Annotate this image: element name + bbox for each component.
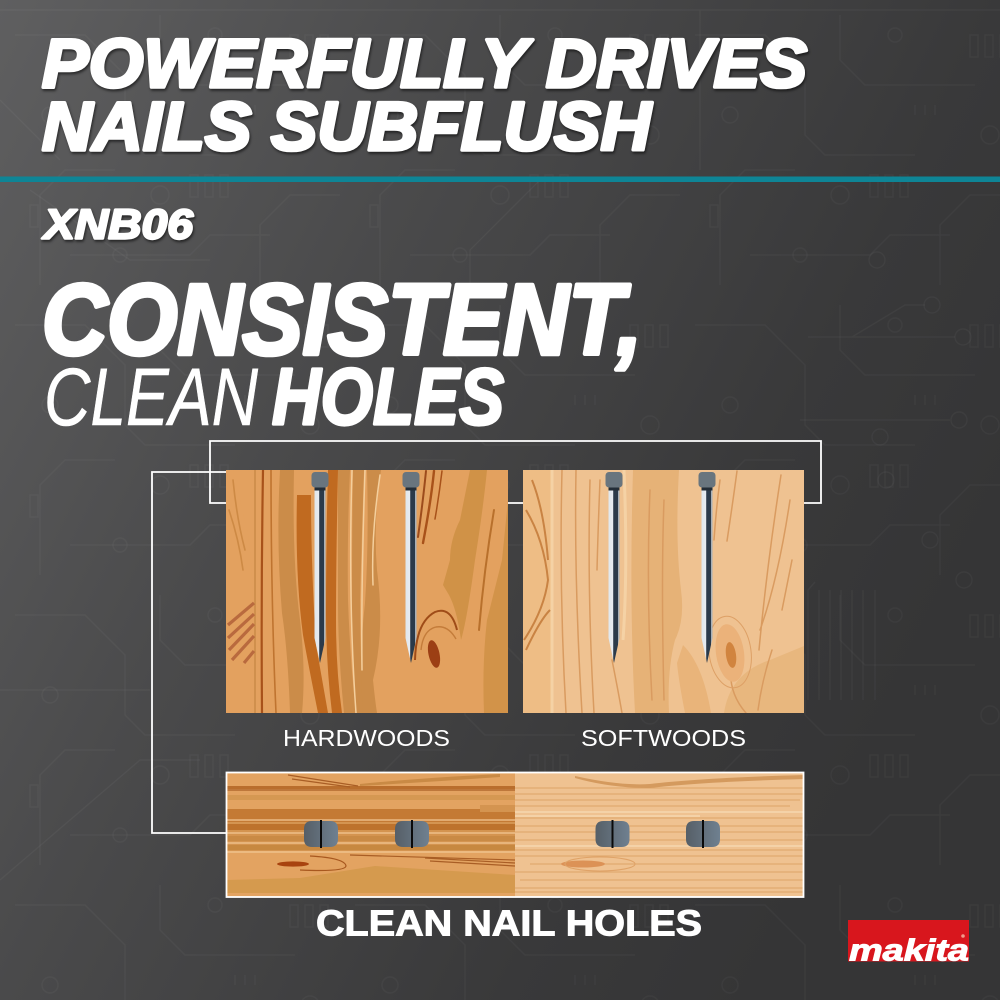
nail holes (304, 820, 720, 848)
teal divider (0, 176, 1000, 182)
title: POWERFULLY DRIVES (42, 25, 807, 102)
subheading (42, 264, 642, 443)
panel: clean nail holes board (226, 772, 804, 897)
model number: XNB06 (42, 200, 194, 248)
logo: makita (848, 920, 969, 968)
label: softwoods: SOFTWOODS (581, 725, 746, 751)
subheading: CONSISTENT, (42, 264, 642, 376)
title: NAILS SUBFLUSH (42, 88, 653, 165)
logo: makita: makita (849, 932, 969, 968)
subheading: CLEAN (44, 352, 259, 443)
subheading: HOLES (272, 352, 504, 441)
nails: softwoods (606, 472, 716, 663)
panel: softwoods (523, 470, 804, 713)
label: hardwoods: HARDWOODS (283, 725, 450, 751)
caption: clean nail holes: CLEAN NAIL HOLES (316, 902, 702, 944)
panel: hardwoods (226, 470, 508, 713)
nails: hardwoods (312, 472, 420, 663)
title (42, 25, 807, 165)
connector lines (152, 441, 821, 833)
